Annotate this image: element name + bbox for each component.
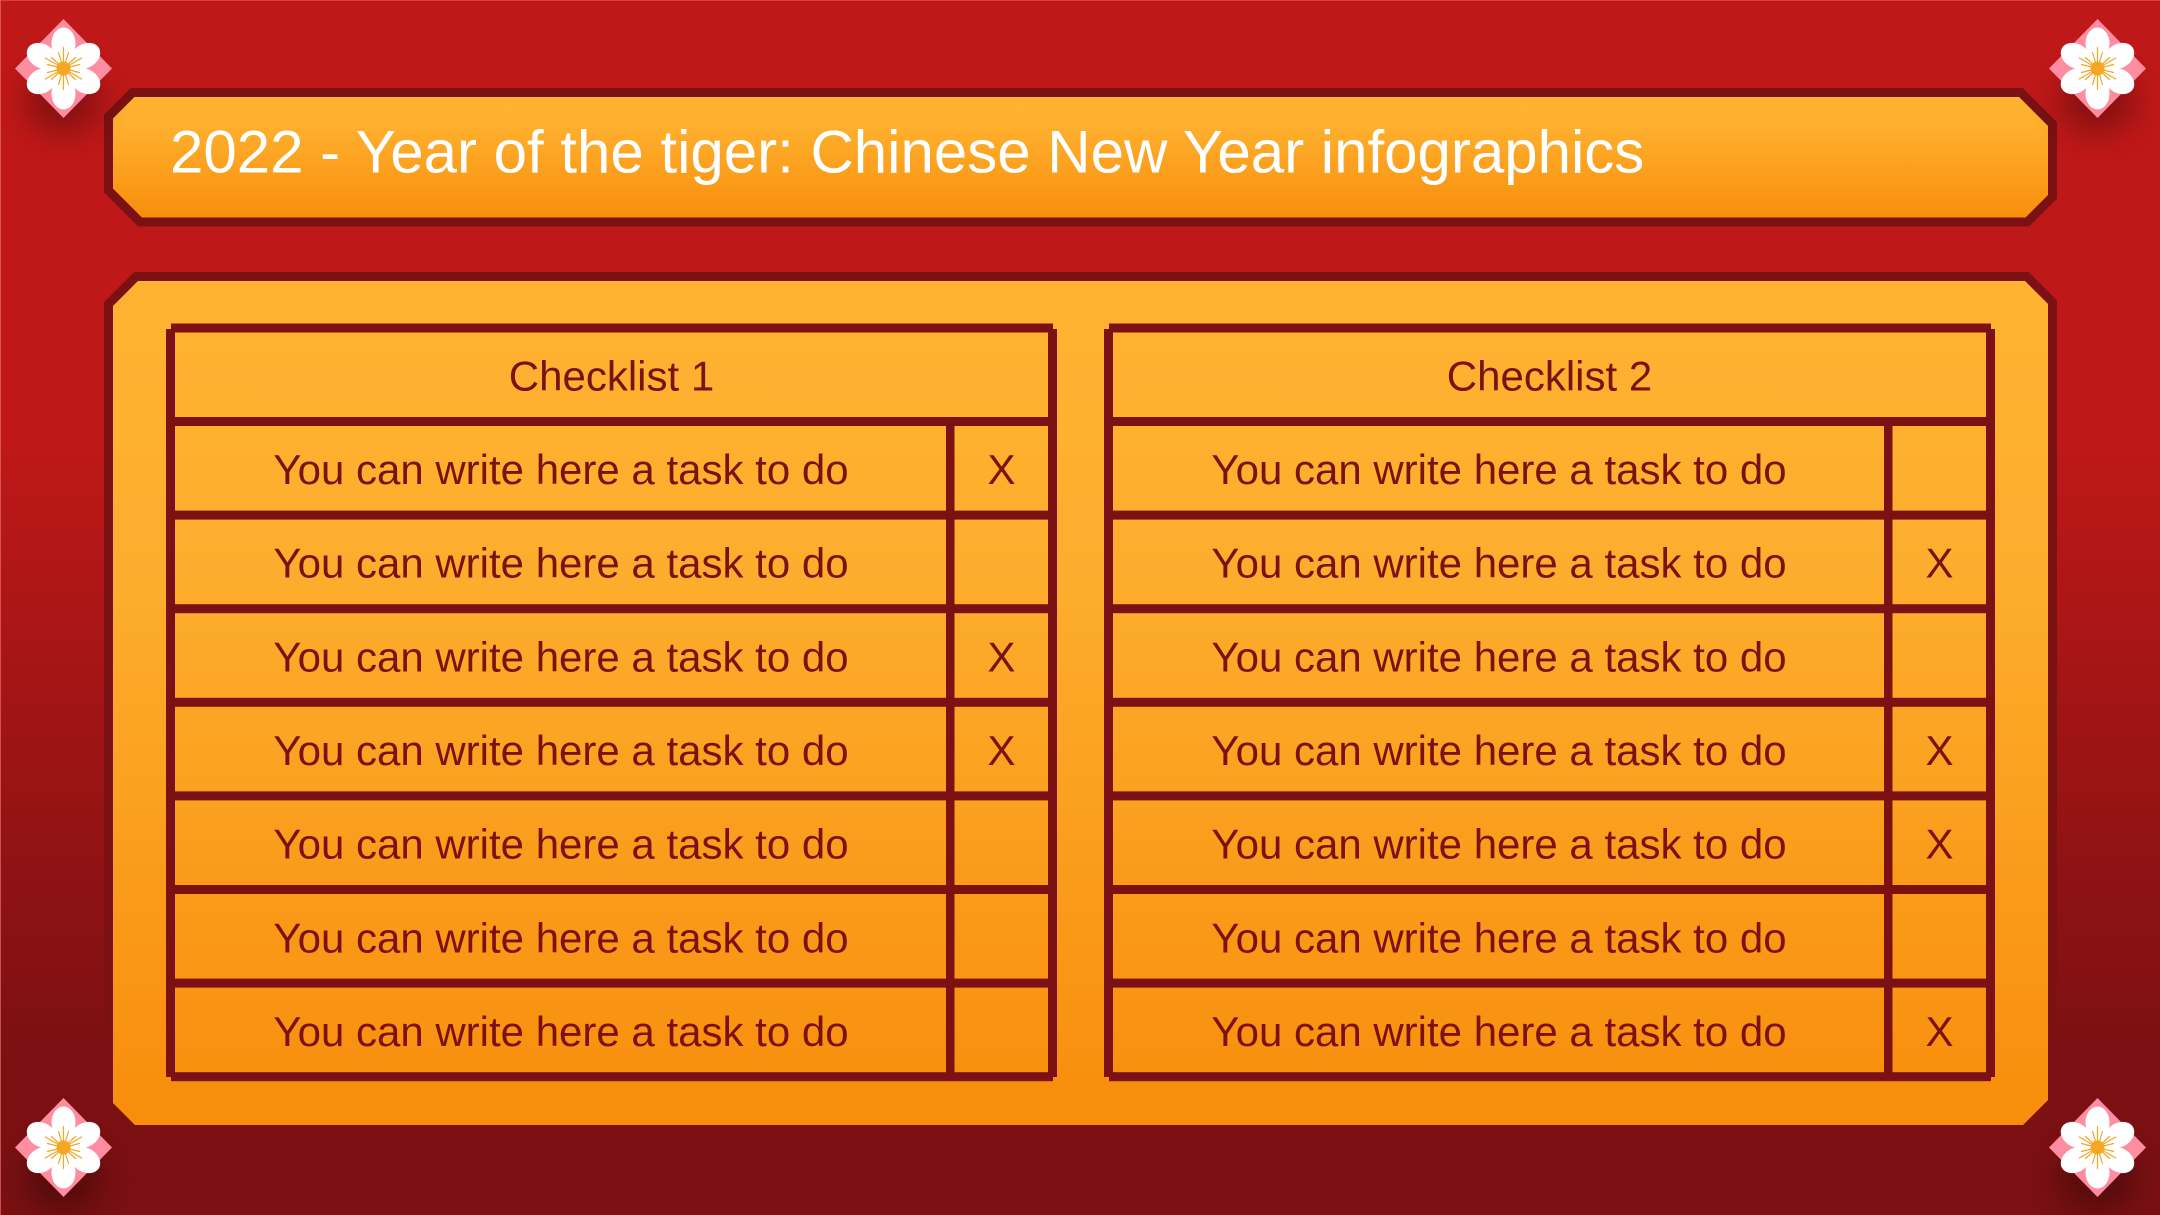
table: checklist 2 bbox=[1104, 324, 1995, 1081]
checklist 2 tasks: You can write here a task to do bbox=[1211, 540, 1787, 587]
checklist 1 tasks: You can write here a task to do bbox=[273, 540, 849, 587]
checklist 1 marks: X bbox=[987, 633, 1016, 680]
checklist 2 tasks bbox=[1211, 446, 1787, 1055]
checklist 2 marks bbox=[1925, 540, 1954, 1055]
checklist 2 tasks: You can write here a task to do bbox=[1211, 633, 1787, 680]
checklist 1 tasks: You can write here a task to do bbox=[273, 446, 849, 493]
checklist 2 tasks: You can write here a task to do bbox=[1211, 446, 1787, 493]
checklist 2 tasks: You can write here a task to do bbox=[1211, 914, 1787, 961]
title banner bbox=[108, 92, 2052, 222]
icon: flower bottom right bbox=[2049, 1098, 2146, 1212]
checklist 2 tasks: You can write here a task to do bbox=[1211, 727, 1787, 774]
checklist 2 marks: X bbox=[1925, 540, 1954, 587]
checklist 2 marks: X bbox=[1925, 1008, 1954, 1055]
checklist 2 marks: X bbox=[1925, 727, 1954, 774]
checklist 1 heading: Checklist 1 bbox=[509, 352, 714, 399]
checklist 2 marks: X bbox=[1925, 821, 1954, 868]
checklist 1 marks: X bbox=[987, 446, 1016, 493]
checklist 1 tasks: You can write here a task to do bbox=[273, 633, 849, 680]
checklist 1 tasks: You can write here a task to do bbox=[273, 727, 849, 774]
checklist 2 grid bbox=[1104, 324, 1995, 1081]
icon: flower top left bbox=[15, 19, 112, 132]
checklist 1 tasks: You can write here a task to do bbox=[273, 821, 849, 868]
icon: flower bottom left bbox=[15, 1098, 112, 1212]
checklist 2 heading: Checklist 2 bbox=[1447, 352, 1652, 399]
panel: checklists bbox=[108, 276, 2052, 1130]
checklist 1 tasks: You can write here a task to do bbox=[273, 914, 849, 961]
checklist 1 grid bbox=[166, 324, 1057, 1081]
title: 2022 - Year of the tiger: Chinese New Year infographics bbox=[170, 118, 1644, 186]
checklist 1 marks: X bbox=[987, 727, 1016, 774]
icon: flower top right bbox=[2049, 19, 2146, 132]
checklist 2 tasks: You can write here a task to do bbox=[1211, 1008, 1787, 1055]
checklist 1 marks bbox=[987, 446, 1016, 774]
checklist 1 tasks bbox=[273, 446, 849, 1055]
checklist 2 tasks: You can write here a task to do bbox=[1211, 821, 1787, 868]
checklist 1 tasks: You can write here a task to do bbox=[273, 1008, 849, 1055]
table: checklist 1 bbox=[166, 324, 1057, 1081]
